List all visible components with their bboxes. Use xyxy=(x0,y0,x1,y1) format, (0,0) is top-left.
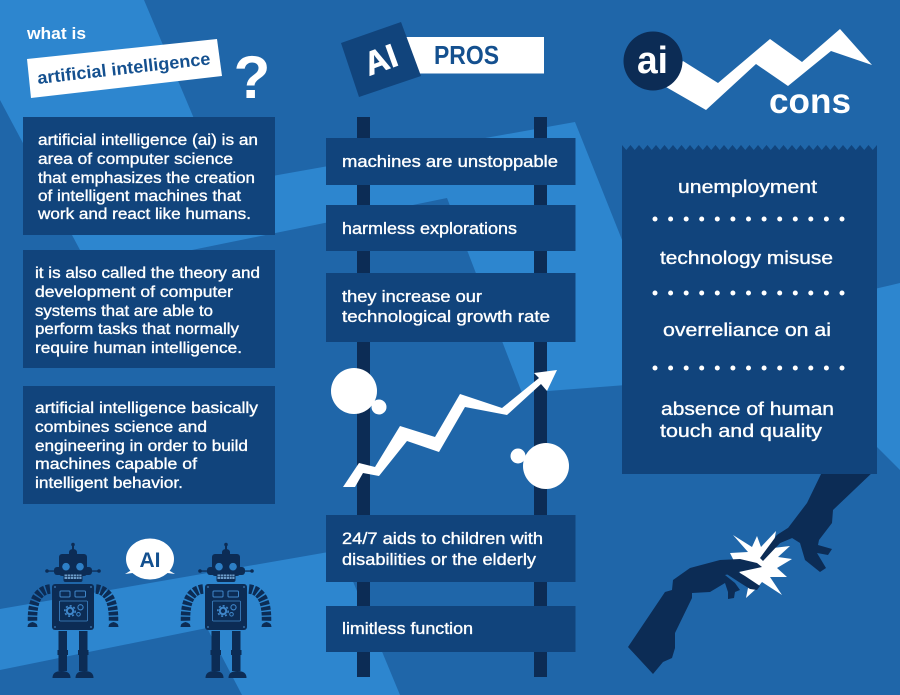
panel: limitless function xyxy=(326,606,576,652)
heading: AI pros xyxy=(341,22,544,97)
panel: definition 3: artificial intelligence basically xyxy=(35,400,258,417)
tilted white banner xyxy=(27,39,222,98)
panel: aids to children and elderly xyxy=(326,515,576,582)
callout: AI speech bubble xyxy=(125,538,175,580)
ladder posts xyxy=(357,117,547,677)
panel: definition 3 xyxy=(23,386,275,504)
chart: rising arrow with bubbles xyxy=(331,368,569,489)
panel: definition 3: combines science and xyxy=(35,419,207,436)
banner text: artificial intelligence xyxy=(36,48,212,88)
cons label: cons xyxy=(769,82,851,121)
icon: upper hand xyxy=(760,470,875,572)
heading: ai cons xyxy=(624,29,872,121)
white pros banner xyxy=(400,37,544,74)
heading text: what is: what is xyxy=(26,24,86,43)
dotted divider 2 xyxy=(652,290,844,296)
ai badge xyxy=(624,32,682,90)
panel: definition 3: intelligent behavior. xyxy=(35,475,183,492)
panel: limitless function: limitless function xyxy=(342,620,473,638)
panel: definition 2: development of computer xyxy=(35,284,233,301)
zigzag ribbon xyxy=(666,29,872,110)
icon: spark between hands xyxy=(730,531,792,598)
panel: technological growth rate xyxy=(326,273,576,342)
panel: aids to children and elderly: disabilities or the elderly xyxy=(342,551,537,569)
panel: definition 1: artificial intelligence (ai) is an xyxy=(38,132,258,149)
panel: definition 3: engineering in order to build xyxy=(35,438,248,455)
panel: definition 1: that emphasizes the creation xyxy=(38,170,255,187)
panel: harmless explorations: harmless explorations xyxy=(342,220,517,238)
panel: definition 2: require human intelligence. xyxy=(35,340,242,357)
panel: definition 2: perform tasks that normally xyxy=(35,321,239,338)
panel: technological growth rate: they increase our xyxy=(342,288,483,306)
panel: aids to children and elderly: 24/7 aids to children with xyxy=(342,530,543,548)
AI label: AI xyxy=(359,37,402,83)
panel: machines are unstoppable: machines are unstoppable xyxy=(342,153,558,171)
dotted divider 3 xyxy=(652,366,844,370)
panel: definition 1: area of computer science xyxy=(38,151,233,168)
heading: what is artificial intelligence xyxy=(26,24,270,111)
question mark: ? xyxy=(234,44,270,111)
panel: machines are unstoppable xyxy=(326,138,576,185)
panel: definition 1 xyxy=(23,117,275,235)
panel: cons list: absence of human xyxy=(661,399,834,419)
tilted AI square xyxy=(341,22,421,97)
icon: robot right xyxy=(180,543,272,678)
icon: upper fingertip over spark xyxy=(760,528,792,561)
icon: lower hand xyxy=(628,559,762,674)
icon: robot left xyxy=(28,543,118,678)
panel: harmless explorations xyxy=(326,205,576,251)
callout: AI speech bubble: AI xyxy=(140,549,160,572)
panel: definition 2: systems that are able to xyxy=(35,303,213,320)
panel: cons list: technology misuse xyxy=(660,248,833,268)
panel: cons list: unemployment xyxy=(678,177,817,197)
panel: definition 2 xyxy=(23,250,275,368)
panel: technological growth rate: technological growth rate xyxy=(342,308,550,326)
panel: definition 1: of intelligent machines that xyxy=(38,188,242,205)
panel: cons list: touch and quality xyxy=(660,421,822,441)
panel: definition 1: work and react like humans. xyxy=(37,206,251,223)
pros label: PROS xyxy=(434,40,499,70)
panel: cons list: overreliance on ai xyxy=(663,320,831,340)
panel: cons list xyxy=(622,145,877,474)
panel: definition 3: machines capable of xyxy=(35,456,198,473)
panel: definition 2: it is also called the theory and xyxy=(35,265,260,282)
ai label: ai xyxy=(637,40,668,82)
dotted divider 1 xyxy=(652,216,844,222)
